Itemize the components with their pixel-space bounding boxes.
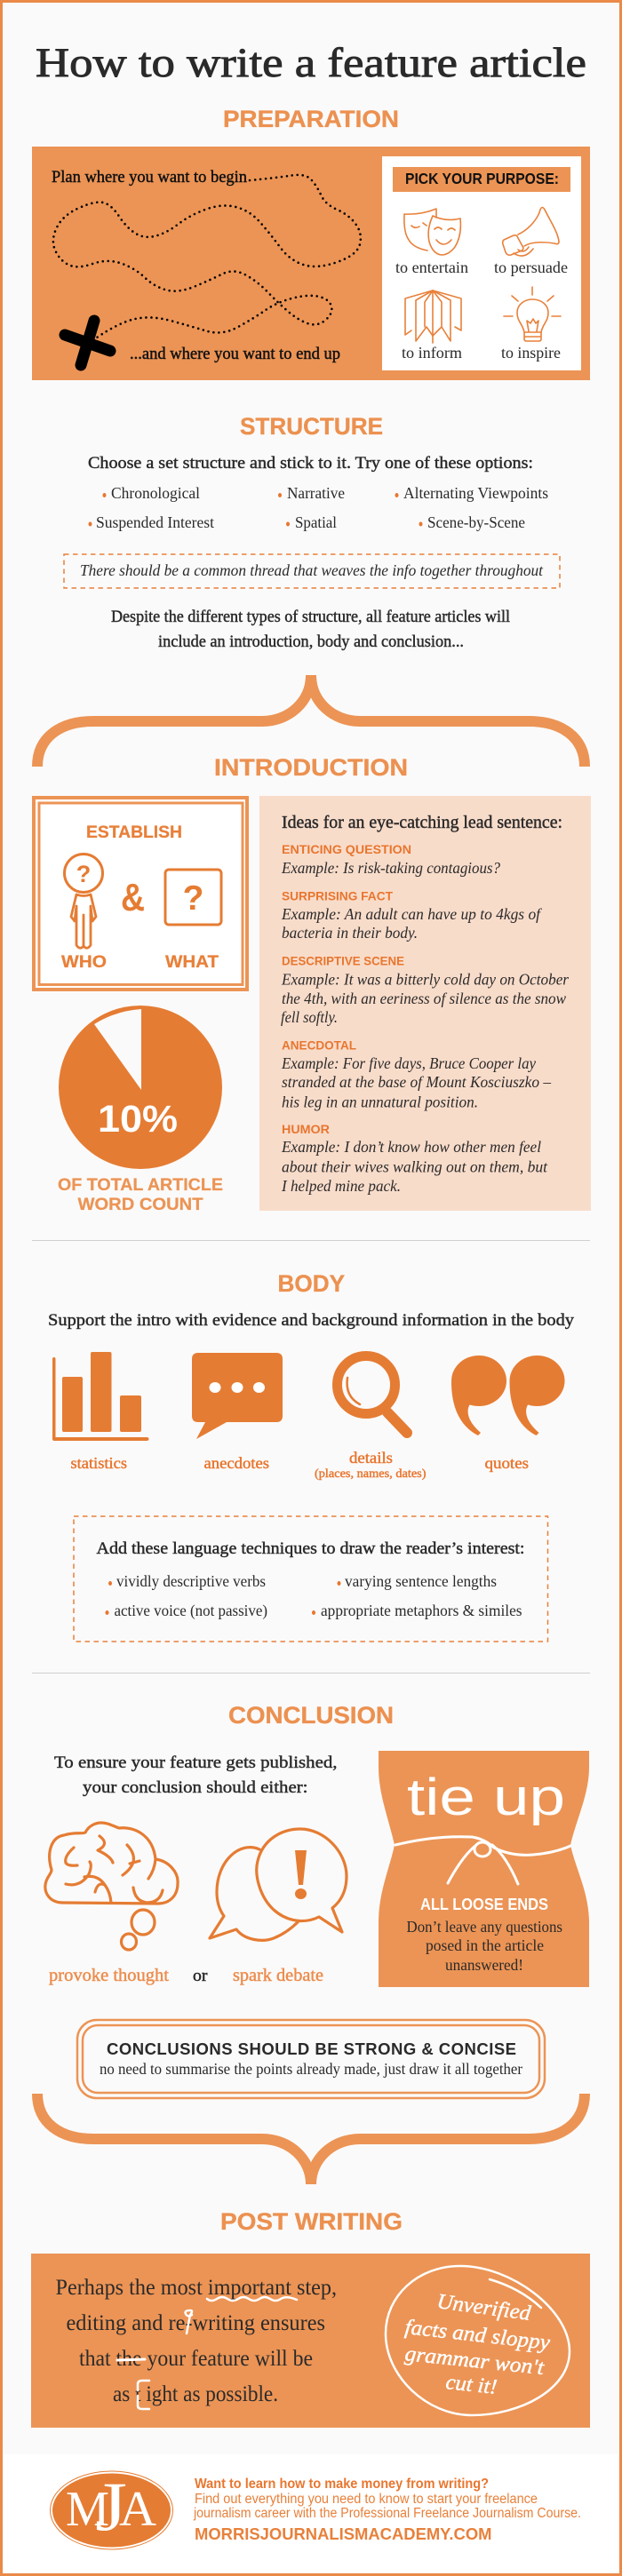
icon: person with question mark: ? <box>76 861 91 887</box>
brace: bottom <box>37 2094 585 2184</box>
label: to inform: to inform <box>402 344 462 362</box>
panel: establish who and what <box>34 798 247 990</box>
text: loose ends advice <box>407 1918 562 1974</box>
label: details: details <box>349 1449 393 1467</box>
label: spark debate: spark debate <box>233 1966 323 1985</box>
logo: MJA: M <box>66 2482 109 2537</box>
idea: anecdotal: his leg in an unnatural position. <box>282 1093 478 1110</box>
idea: descriptive scene: DESCRIPTIVE SCENE <box>282 954 404 968</box>
list: structure options <box>89 484 548 531</box>
list: structure options: Scene-by-Scene <box>427 513 525 531</box>
brace: top <box>37 675 585 767</box>
callout: unverified facts circle: facts and sloppy <box>403 2316 552 2355</box>
label: quotes: quotes <box>485 1454 529 1472</box>
icon: speech bubble <box>192 1353 283 1439</box>
list: structure options: Narrative <box>287 484 345 502</box>
pie chart: 10 percent: 10% <box>98 1098 178 1141</box>
icon: light bulb <box>504 287 561 341</box>
label: anecdotes: anecdotes <box>204 1454 269 1472</box>
title: How to write a feature article <box>36 40 586 86</box>
heading: all loose ends: ALL LOOSE ENDS <box>420 1896 548 1913</box>
idea: humor <box>281 1122 548 1195</box>
label: what: WHAT <box>165 952 219 972</box>
callout: strong and concise <box>77 2020 545 2098</box>
footer text <box>193 2477 581 2543</box>
icon: quotation marks <box>451 1356 565 1435</box>
text: editing paragraph <box>55 2276 337 2406</box>
panel: pick your purpose <box>382 156 581 370</box>
proofreading marks <box>117 2297 297 2409</box>
icon: theatre masks <box>404 209 460 255</box>
heading: structure: STRUCTURE <box>240 413 383 440</box>
caption: of total article word count: OF TOTAL ARTICLE <box>58 1175 223 1195</box>
panel: lead sentence ideas <box>259 796 591 1211</box>
caption: of total article word count: WORD COUNT <box>78 1195 203 1214</box>
idea: surprising fact: Example: An adult can have up to 4kgs of <box>281 905 543 923</box>
idea: humor: I helped mine pack. <box>281 1177 401 1195</box>
text: where to end up: ...and where you want to end up <box>130 345 340 363</box>
callout: unverified facts circle: cut it! <box>444 2371 498 2399</box>
label: to entertain: to entertain <box>395 258 468 276</box>
idea: anecdotal: ANECDOTAL <box>282 1038 356 1052</box>
text: editing paragraph: Perhaps the most important step, <box>55 2276 337 2300</box>
label: details <box>315 1449 427 1481</box>
callout: language techniques: Add these language techniques to draw the reader’s interest: <box>96 1539 524 1558</box>
callout: common thread: There should be a common thread that weaves the info together throughout <box>80 561 544 579</box>
logo: MJA: A <box>119 2482 157 2537</box>
idea: descriptive scene <box>281 954 570 1026</box>
idea: enticing question: ENTICING QUESTION <box>282 842 411 856</box>
icon: brain thought <box>45 1823 178 1950</box>
pie chart: 10 percent <box>59 1006 222 1169</box>
callout: language techniques: varying sentence lengths <box>345 1572 497 1590</box>
text: plan where to begin: Plan where you want to begin <box>52 168 247 187</box>
text: editing paragraph: that the your feature will be <box>79 2347 313 2371</box>
icon: box with question mark <box>165 870 221 925</box>
icon: magnifying glass <box>338 1356 407 1433</box>
text: editing paragraph: editing and re-writing ensures <box>66 2311 325 2335</box>
text: structure intro: Choose a set structure and stick to it. Try one of these options: <box>88 454 533 473</box>
label: details: (places, names, dates) <box>315 1467 427 1481</box>
footer text: MORRISJOURNALISMACADEMY.COM <box>195 2524 492 2543</box>
text: editing paragraph: as t ight as possible. <box>113 2382 278 2406</box>
idea: descriptive scene: the 4th, with an eeriness of silence as the snow <box>282 990 566 1007</box>
idea: humor: about their wives walking out on them, but <box>282 1158 548 1176</box>
label: who: WHO <box>61 952 107 972</box>
caption: of total article word count <box>58 1175 223 1214</box>
list: structure options: Alternating Viewpoints <box>403 484 548 502</box>
footer text: Find out everything you need to know to start your freelance <box>195 2492 538 2507</box>
idea: surprising fact: bacteria in their body. <box>282 924 418 942</box>
label: to inspire: to inspire <box>501 344 561 362</box>
idea: anecdotal: Example: For five days, Bruce Cooper lay <box>281 1054 536 1072</box>
heading: body: BODY <box>277 1270 345 1297</box>
callout: language techniques: appropriate metaphors & similes <box>321 1602 522 1619</box>
idea: anecdotal <box>281 1038 552 1110</box>
icon: x mark <box>65 321 110 365</box>
text: to ensure your feature gets published <box>54 1753 338 1797</box>
callout: language techniques: vividly descriptive verbs <box>116 1572 266 1590</box>
icon: box with question mark: ? <box>183 879 203 918</box>
idea: descriptive scene: fell softly. <box>281 1008 338 1026</box>
heading: pick your purpose: PICK YOUR PURPOSE: <box>405 170 559 187</box>
icon: person with question mark <box>64 855 103 948</box>
logo: MJA <box>50 2468 172 2549</box>
callout: unverified facts circle: grammar won't <box>403 2342 546 2380</box>
heading: introduction: INTRODUCTION <box>214 754 408 781</box>
callout: strong and concise: no need to summarise the points already made, just draw it all together <box>100 2060 522 2078</box>
callout: common thread <box>64 554 560 588</box>
footer text: Want to learn how to make money from writing? <box>195 2477 489 2492</box>
footer text: journalism career with the Professional Freelance Journalism Course. <box>193 2506 581 2521</box>
idea: surprising fact <box>281 888 543 942</box>
idea: enticing question <box>281 842 500 877</box>
callout: language techniques <box>74 1516 547 1642</box>
dotted route <box>53 175 361 338</box>
text: loose ends advice: unanswered! <box>445 1956 523 1974</box>
idea: enticing question: Example: Is risk-taking contagious? <box>281 859 500 877</box>
text: despite the different types: Despite the different types of structure, all feature articles will <box>111 608 510 626</box>
list: structure options: Suspended Interest <box>96 513 214 531</box>
idea: descriptive scene: Example: It was a bitterly cold day on October <box>281 970 570 988</box>
icon: megaphone <box>503 208 559 256</box>
idea: humor: Example: I don’t know how other men feel <box>281 1138 541 1156</box>
ampersand: & <box>121 876 145 919</box>
text: to ensure your feature gets published: To ensure your feature gets published, <box>54 1753 338 1772</box>
callout: strong and concise: CONCLUSIONS SHOULD BE STRONG & CONCISE <box>107 2039 516 2058</box>
script text: tie up: tie up <box>407 1769 565 1826</box>
label: to persuade: to persuade <box>494 258 568 276</box>
heading: preparation: PREPARATION <box>223 106 399 132</box>
list: structure options: Spatial <box>295 513 337 531</box>
logo: MJA: J <box>95 2468 127 2545</box>
text: body intro: Support the intro with evidence and background information in the body <box>48 1311 575 1330</box>
text: despite the different types <box>111 608 510 651</box>
text: loose ends advice: posed in the article <box>426 1936 544 1954</box>
label: provoke thought: provoke thought <box>49 1966 169 1985</box>
idea: humor: HUMOR <box>282 1122 330 1136</box>
callout: unverified facts circle: Unverified <box>435 2290 533 2326</box>
label: statistics: statistics <box>71 1454 127 1472</box>
icon: rope knot <box>395 1837 570 1884</box>
label: or: or <box>193 1967 208 1985</box>
callout: unverified facts circle <box>386 2266 570 2415</box>
heading: establish: ESTABLISH <box>86 823 182 842</box>
panel: tie up all loose ends <box>379 1751 589 1987</box>
text: despite the different types: include an introduction, body and conclusion... <box>158 632 464 651</box>
panel: preparation <box>32 147 590 380</box>
icon: statistics bar chart <box>52 1352 149 1441</box>
idea: surprising fact: SURPRISING FACT <box>282 888 393 902</box>
heading: conclusion: CONCLUSION <box>228 1702 394 1729</box>
list: structure options: Chronological <box>111 484 200 502</box>
text: loose ends advice: Don’t leave any questions <box>407 1918 562 1936</box>
icon: debate speech bubbles <box>210 1829 347 1940</box>
heading: post writing: POST WRITING <box>220 2208 403 2235</box>
panel: post writing <box>31 2254 590 2428</box>
text: to ensure your feature gets published: your conclusion should either: <box>83 1778 307 1797</box>
idea: anecdotal: stranded at the base of Mount Kosciuszko – <box>282 1073 552 1091</box>
heading: lead sentence: Ideas for an eye-catching lead sentence: <box>282 813 562 832</box>
callout: language techniques: active voice (not passive) <box>114 1602 267 1619</box>
icon: book <box>405 290 461 343</box>
